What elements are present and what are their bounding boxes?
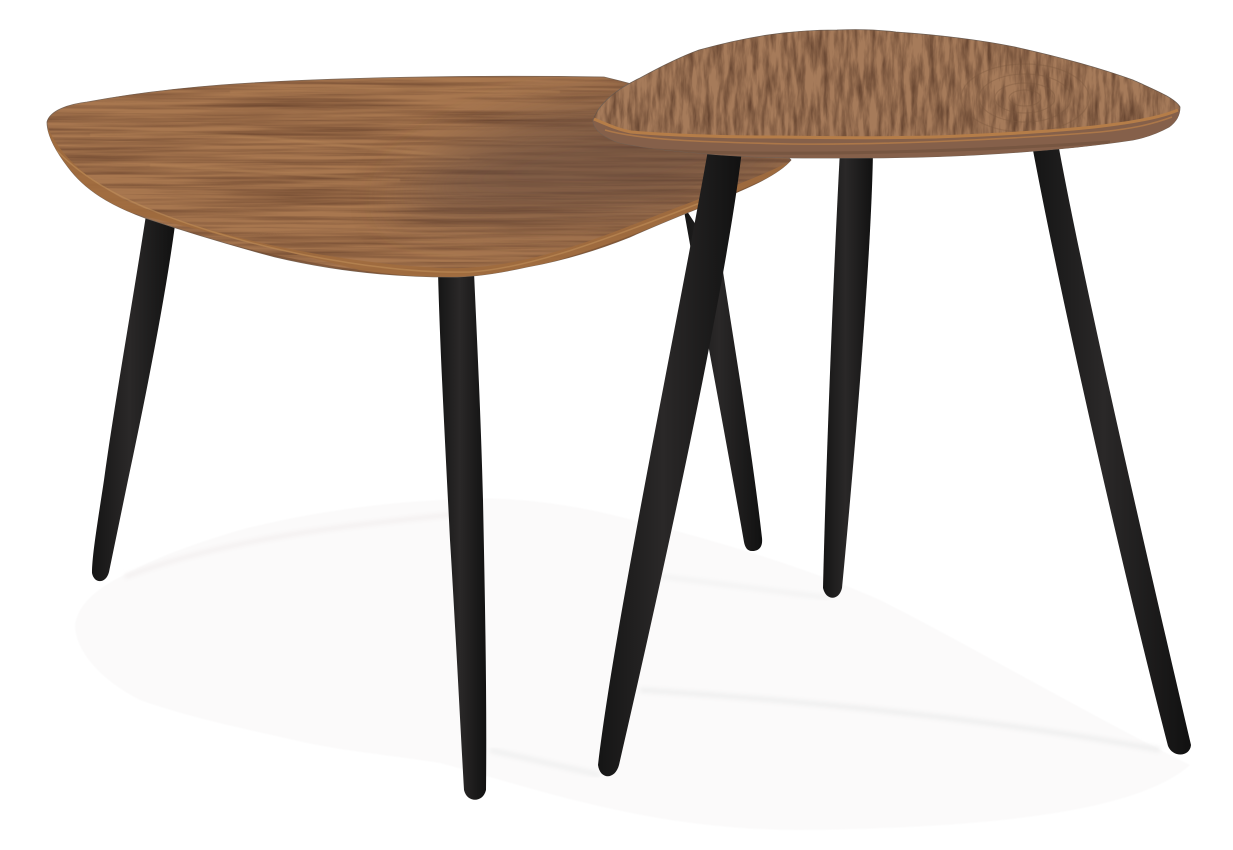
left table back leg [683, 205, 762, 551]
right table back leg [823, 150, 873, 598]
shadow cast by small table [390, 105, 800, 221]
wood knot rings [961, 64, 1089, 132]
wood grain, right top [590, 25, 1185, 165]
left top bevelled edge [48, 128, 789, 277]
wood grain, left top [47, 76, 791, 270]
left table top [46, 76, 792, 278]
floor shadow [75, 498, 1190, 830]
light wood streaks [90, 89, 560, 180]
right table front leg [598, 150, 742, 776]
left table left leg [92, 215, 175, 581]
left table front leg [438, 272, 486, 800]
right table right leg [1032, 143, 1191, 755]
right top edge band [593, 109, 1180, 158]
right table top [592, 29, 1180, 158]
